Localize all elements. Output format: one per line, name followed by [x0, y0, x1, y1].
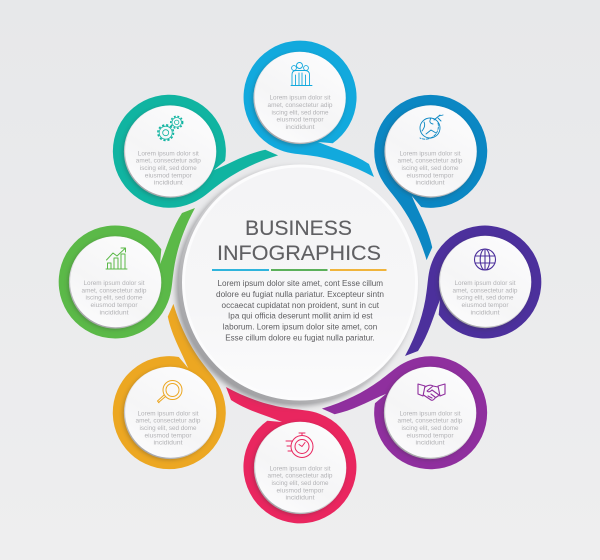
- text: bottom: Lorem ipsum dolor sit: [270, 465, 331, 472]
- body text: Esse cillum dolore eu fugiat nulla pariatur.: [225, 332, 375, 342]
- text: top right: amet, consectetur adip: [398, 158, 463, 165]
- text: top left: Lorem ipsum dolor sit: [138, 150, 199, 157]
- text: bottom right: incididunt: [416, 440, 445, 447]
- panel: top blue: [244, 41, 374, 177]
- text: right: iscing elit, sed dome: [456, 295, 514, 302]
- panel: bottom left orange: [77, 304, 266, 493]
- body text: dolore eu fugiat nulla pariatur. Excepteur sintn: [216, 289, 384, 299]
- text: right: incididunt: [470, 309, 500, 316]
- text: left: [82, 280, 147, 316]
- text: bottom: incididunt: [286, 495, 315, 502]
- text: top right: Lorem ipsum dolor sit: [400, 150, 461, 157]
- disc: bottom right: [383, 367, 476, 460]
- text: top right: [398, 150, 463, 187]
- text: top: [268, 95, 333, 131]
- icon: magnifier: [158, 380, 182, 403]
- ribbon: blue: [244, 41, 374, 177]
- text: bottom left: Lorem ipsum dolor sit: [138, 410, 199, 417]
- text: top: amet, consectetur adip: [268, 102, 333, 109]
- title: BUSINESS: [245, 217, 352, 240]
- panel: top right dark blue: [334, 71, 523, 260]
- icon: growth chart: [106, 248, 127, 269]
- text: bottom left: incididunt: [154, 440, 183, 447]
- ribbon: green: [59, 208, 195, 338]
- panel: top left teal: [89, 59, 278, 248]
- text: top left: incididunt: [154, 180, 183, 187]
- icon: team: [291, 62, 312, 86]
- text: top left: [136, 150, 201, 187]
- ribbon: red: [226, 387, 356, 523]
- text: bottom: eiusmod tempor: [276, 487, 324, 494]
- body text: [216, 278, 384, 342]
- disc: bottom: [253, 422, 346, 515]
- ribbon: indigo: [405, 226, 541, 356]
- panel: left green: [59, 208, 195, 338]
- disc: top left: [123, 105, 216, 199]
- text: right: eiusmod tempor: [462, 302, 509, 309]
- ribbon: teal: [89, 59, 278, 248]
- text: bottom left: iscing elit, sed dome: [140, 425, 197, 432]
- text: left: Lorem ipsum dolor sit: [84, 280, 145, 287]
- title: INFOGRAPHICS: [217, 242, 381, 265]
- panel: centre circle: [176, 164, 418, 406]
- text: right: amet, consectetur adip: [452, 287, 518, 294]
- icon: gears: [158, 116, 183, 140]
- disc: top right: [384, 105, 477, 199]
- text: left: incididunt: [100, 309, 129, 316]
- icon: globe with plane: [420, 115, 443, 139]
- ribbon: dark blue: [334, 71, 523, 260]
- text: top right: incididunt: [416, 180, 445, 187]
- icon: handshake: [418, 384, 445, 400]
- text: top left: amet, consectetur adip: [136, 158, 201, 165]
- text: top left: eiusmod tempor: [145, 172, 193, 179]
- panel: right purple: [405, 226, 541, 356]
- text: bottom: amet, consectetur adip: [268, 473, 333, 480]
- disc: centre: [176, 164, 418, 406]
- panel: bottom red: [226, 387, 356, 523]
- text: right: [452, 280, 518, 316]
- text: left: amet, consectetur adip: [82, 287, 147, 294]
- ribbon: violet: [322, 316, 511, 505]
- icon: stopwatch: [286, 433, 313, 458]
- tri-colour divider: [212, 269, 386, 271]
- icon: globe: [474, 249, 496, 270]
- text: bottom: iscing elit, sed dome: [272, 480, 329, 487]
- text: top left: iscing elit, sed dome: [140, 165, 197, 172]
- disc: top: [252, 52, 346, 146]
- body text: occaecat cupidatat non proident, sunt in cut: [222, 300, 380, 310]
- text: bottom right: iscing elit, sed dome: [402, 425, 459, 432]
- text: bottom right: [398, 410, 463, 447]
- text: left: eiusmod tempor: [90, 302, 138, 309]
- text: top right: iscing elit, sed dome: [402, 165, 459, 172]
- disc: right: [438, 236, 531, 330]
- text: top: incididunt: [286, 124, 315, 131]
- title: [217, 217, 381, 265]
- ribbon: orange: [77, 304, 266, 493]
- body text: laborum. Lorem ipsum dolor site amet, con: [223, 322, 377, 332]
- disc: bottom left: [123, 367, 216, 460]
- text: bottom: [268, 465, 333, 502]
- text: right: Lorem ipsum dolor sit: [454, 280, 516, 287]
- text: bottom left: [136, 410, 201, 447]
- text: bottom right: eiusmod tempor: [406, 432, 454, 439]
- text: bottom right: Lorem ipsum dolor sit: [400, 410, 461, 417]
- text: bottom right: amet, consectetur adip: [398, 418, 463, 425]
- text: bottom left: amet, consectetur adip: [136, 418, 201, 425]
- body text: Lorem ipsum dolor site amet, cont Esse cillum: [218, 278, 383, 288]
- text: top: Lorem ipsum dolor sit: [270, 95, 331, 102]
- panel: bottom right violet: [322, 316, 511, 505]
- text: left: iscing elit, sed dome: [86, 295, 143, 302]
- text: top right: eiusmod tempor: [406, 172, 454, 179]
- text: bottom left: eiusmod tempor: [144, 432, 192, 439]
- body text: Ipa qui officia deserunt mollit anim id est: [228, 311, 373, 321]
- text: top: iscing elit, sed dome: [272, 109, 329, 116]
- text: top: eiusmod tempor: [276, 117, 324, 124]
- disc: left: [68, 236, 161, 330]
